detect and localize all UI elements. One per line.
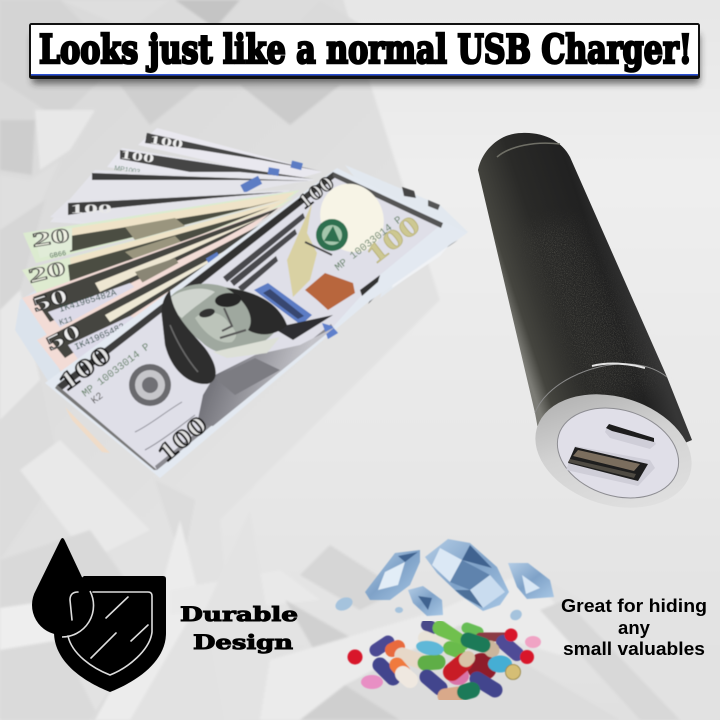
serial number right: MP 10033014 P <box>333 214 405 274</box>
USB port <box>566 446 655 486</box>
second 50 note <box>37 213 270 372</box>
first 20 note <box>23 190 300 263</box>
right diamond <box>508 563 554 599</box>
main 100 dollar note <box>45 168 467 478</box>
collar seam and highlight <box>535 364 667 413</box>
third 100 note <box>50 170 310 225</box>
diamonds <box>333 539 554 622</box>
second 100 note: 100 <box>120 147 155 166</box>
dark borders of the note <box>55 172 443 470</box>
capsules <box>376 625 517 696</box>
second 100 note <box>107 147 315 190</box>
title banner <box>29 23 700 84</box>
first 50 note: IK41965482A <box>58 288 118 315</box>
tablets and balls in front <box>348 628 534 680</box>
top 100 note: 100 <box>149 132 184 151</box>
white end face <box>546 394 690 512</box>
second 20 note: 20 <box>26 257 68 288</box>
label: great for hiding any small valuables: small valuables <box>563 638 705 659</box>
first 50 note: 50 <box>30 285 71 317</box>
watermark area <box>287 173 395 297</box>
drop highlight <box>70 592 78 620</box>
back edge notes behind the fan <box>15 165 468 453</box>
label: great for hiding any small valuables <box>561 595 707 659</box>
large diamond <box>425 539 509 611</box>
fan of banknotes <box>15 128 468 478</box>
second 50 note: IK41965482 <box>73 322 127 353</box>
shield inner outline <box>68 592 152 675</box>
second 50 note: 50 <box>43 320 85 355</box>
pills pile <box>348 625 541 696</box>
first 20 note: 20 <box>30 224 71 252</box>
first 50 note: K11 <box>58 315 75 328</box>
serial number left: MP 10033014 P <box>80 341 153 400</box>
first 50 note <box>22 205 285 335</box>
shield glass lines <box>91 597 148 658</box>
pink and maroon tablets behind <box>361 636 541 689</box>
label: great for hiding any small valuables: Great for hiding <box>561 595 707 616</box>
durable design icon: shield and water drop <box>32 538 166 692</box>
left diamond <box>365 550 420 600</box>
grain texture <box>526 218 657 398</box>
label: durable design <box>180 602 298 654</box>
signatures <box>135 402 195 450</box>
top 100 note <box>138 128 322 180</box>
fourth 100 note: 100 <box>70 201 112 216</box>
shield <box>54 576 166 692</box>
label: durable design: Durable <box>180 602 298 626</box>
main 100 dollar note: 100 <box>153 411 213 468</box>
power bank <box>478 132 692 506</box>
small port <box>605 424 656 449</box>
first 20 note: GB66 <box>49 250 67 261</box>
orange bell <box>305 273 355 310</box>
gold 100 numeral: 100 <box>360 209 426 270</box>
second 20 note <box>22 198 293 293</box>
silver end ring <box>521 376 706 526</box>
federal reserve seal <box>129 364 171 406</box>
label: great for hiding any small valuables: any <box>618 617 651 638</box>
tiny diamonds <box>333 595 524 622</box>
centre small diamond <box>408 586 443 616</box>
fourth 100 note <box>50 190 290 225</box>
fine print block <box>223 213 305 292</box>
water drop <box>32 538 92 635</box>
main 100 dollar note: 100 <box>294 172 339 214</box>
drop outline arc <box>62 591 94 637</box>
second 100 note: MP1003 <box>114 165 141 176</box>
cylinder body <box>478 133 692 470</box>
main 100 dollar note: K2 <box>90 391 106 407</box>
green seal <box>305 219 348 255</box>
label: durable design: Design <box>193 630 294 654</box>
corner 100 numerals: 100 <box>54 341 116 397</box>
blue security ribbon <box>254 283 338 339</box>
note paper <box>45 168 467 478</box>
Franklin portrait <box>162 284 335 426</box>
top cap groove <box>497 143 560 157</box>
